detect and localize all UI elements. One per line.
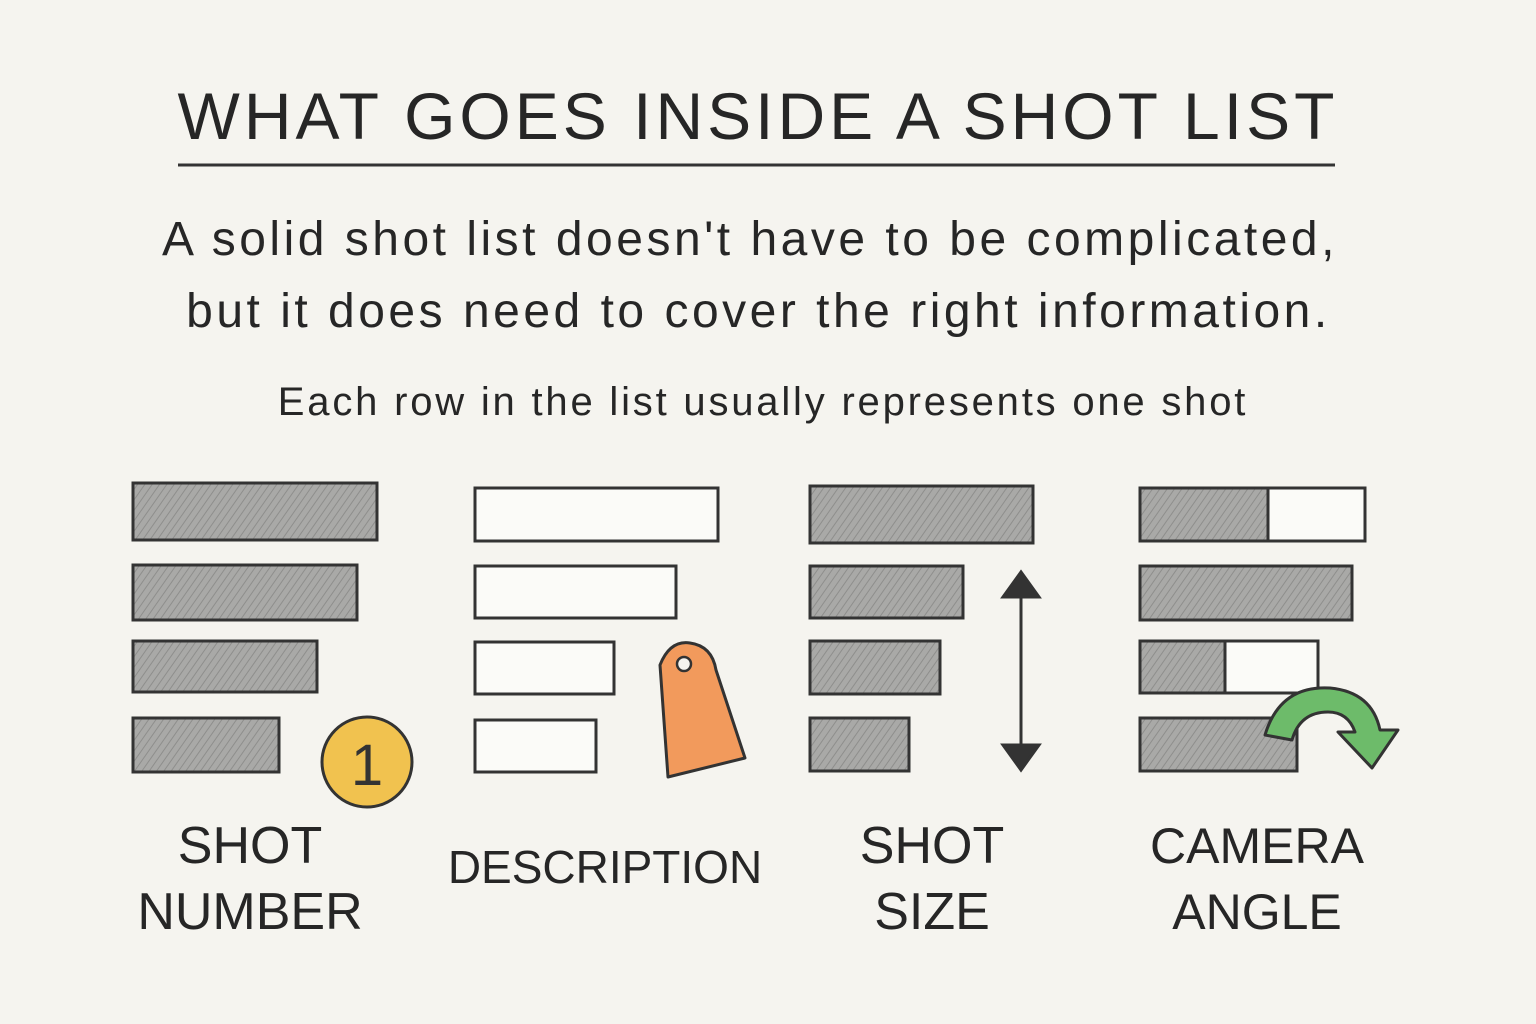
label: shot size	[860, 817, 1004, 941]
intro text: A solid shot list doesn't have to be complicated,	[162, 213, 1338, 266]
column: shot number bars	[133, 483, 377, 772]
label: shot size: SHOT	[860, 817, 1004, 875]
label: shot size: SIZE	[874, 883, 990, 941]
label: camera angle: ANGLE	[1172, 884, 1342, 940]
label: shot number: SHOT	[178, 817, 322, 875]
label: camera angle: CAMERA	[1150, 818, 1364, 874]
intro text	[162, 213, 1338, 338]
label: camera angle	[1150, 818, 1364, 940]
label: shot number: NUMBER	[137, 883, 363, 941]
intro text: but it does need to cover the right information.	[186, 285, 1331, 338]
column: camera angle bars	[1140, 488, 1365, 771]
icon: rotation arrow	[1265, 688, 1398, 768]
sub note: Each row in the list usually represents one shot	[278, 380, 1248, 424]
label: description: DESCRIPTION	[448, 841, 762, 893]
title underline	[178, 164, 1335, 166]
column: description bars	[475, 488, 718, 772]
icon: number coin	[322, 717, 412, 807]
icon: tag	[660, 643, 745, 777]
label: shot number	[137, 817, 363, 941]
title: WHAT GOES INSIDE A SHOT LIST	[178, 79, 1338, 153]
icon: double arrow	[1003, 572, 1039, 770]
column: shot size bars	[810, 486, 1033, 771]
icon: number coin: 1	[351, 733, 383, 798]
